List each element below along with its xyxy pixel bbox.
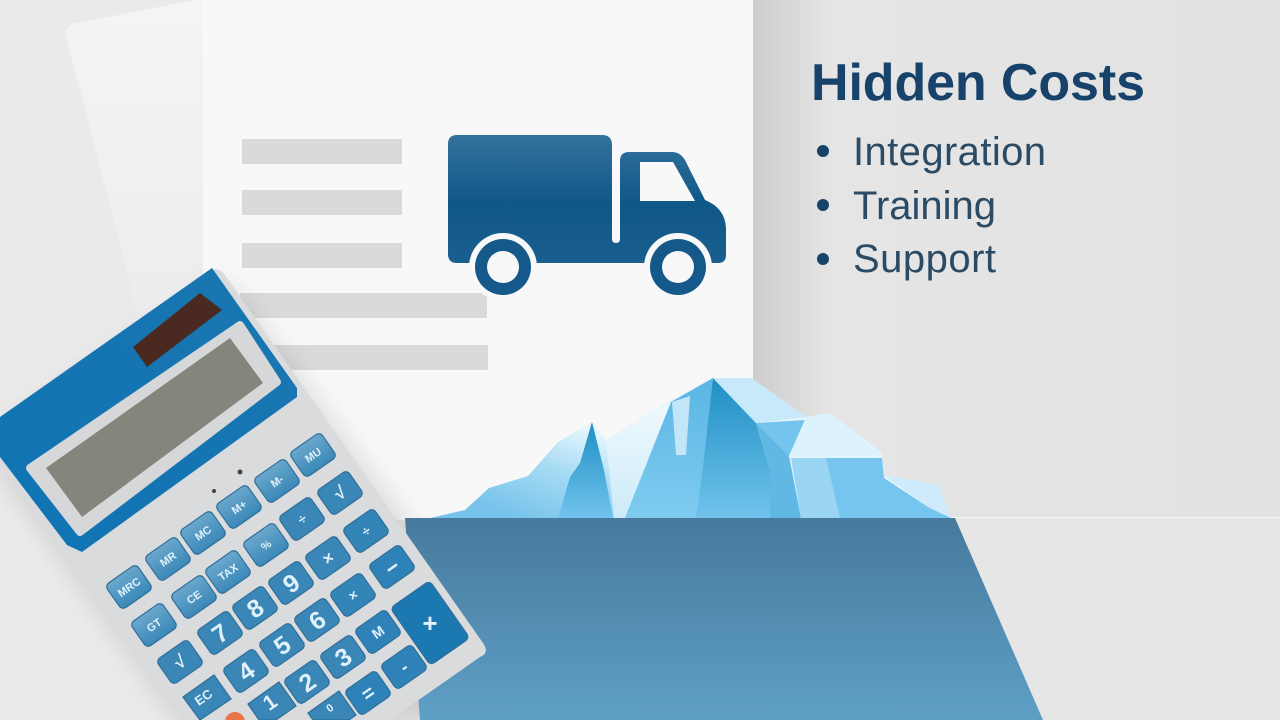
document text lines: [240, 139, 488, 370]
bullet list: Integration: [853, 130, 1046, 174]
keypad: GT: [145, 616, 164, 635]
keypad: 9: [278, 568, 305, 599]
keypad: 1: [259, 690, 282, 715]
keypad: +: [422, 608, 438, 638]
keypad: MU: [303, 446, 324, 466]
keypad: TAX: [216, 561, 241, 584]
calculator shadow: [0, 280, 510, 720]
bullet list: Support: [853, 237, 996, 281]
icon: delivery truck: [448, 135, 726, 301]
keypad: M: [369, 622, 387, 642]
iceberg above water: [430, 378, 951, 518]
display screen: [46, 338, 263, 517]
keypad: 2: [294, 667, 321, 698]
keypad: ×: [345, 586, 361, 604]
calculator: [0, 268, 486, 720]
paper shadow: [753, 0, 833, 518]
keypad: M-: [269, 473, 287, 490]
keypad: 3: [330, 642, 357, 673]
keypad: ÷: [294, 510, 310, 528]
keypad: ×: [319, 548, 338, 569]
keypad: ÷: [358, 522, 374, 540]
heading: Hidden Costs: Hidden Costs: [811, 54, 1145, 112]
keypad: MC: [193, 524, 214, 544]
keypad: 0: [324, 702, 336, 715]
keypad: MRC: [116, 576, 143, 600]
keypad: EC: [192, 686, 216, 709]
calculator blue header: [0, 268, 297, 552]
keypad: 5: [269, 630, 296, 661]
keypad: [105, 432, 470, 720]
keypad: %: [259, 538, 274, 554]
keypad: CE: [185, 589, 204, 607]
keypad: 8: [242, 593, 269, 624]
indicator dots: [212, 470, 242, 493]
bullet list: [817, 130, 1046, 281]
iceberg underwater mass: [405, 518, 1043, 720]
keypad: 6: [304, 605, 331, 636]
keypad: −: [380, 553, 405, 581]
lower background below waterline: [950, 518, 1280, 720]
orange key: [225, 712, 245, 720]
keypad: 4: [233, 656, 260, 687]
back sheet of paper: [65, 0, 210, 330]
keypad: MR: [158, 550, 179, 570]
solar panel: [133, 293, 222, 367]
keypad: √: [170, 651, 190, 673]
display bezel: [30, 325, 277, 532]
bullet list: Training: [853, 184, 996, 228]
panel: document sheet: [203, 0, 753, 520]
keypad: =: [357, 681, 380, 706]
waterline: [950, 517, 1280, 518]
keypad: 7: [207, 618, 234, 649]
keypad: √: [330, 482, 350, 504]
keypad: -: [396, 657, 412, 677]
calculator body: [0, 269, 486, 720]
keypad: M+: [230, 498, 249, 517]
